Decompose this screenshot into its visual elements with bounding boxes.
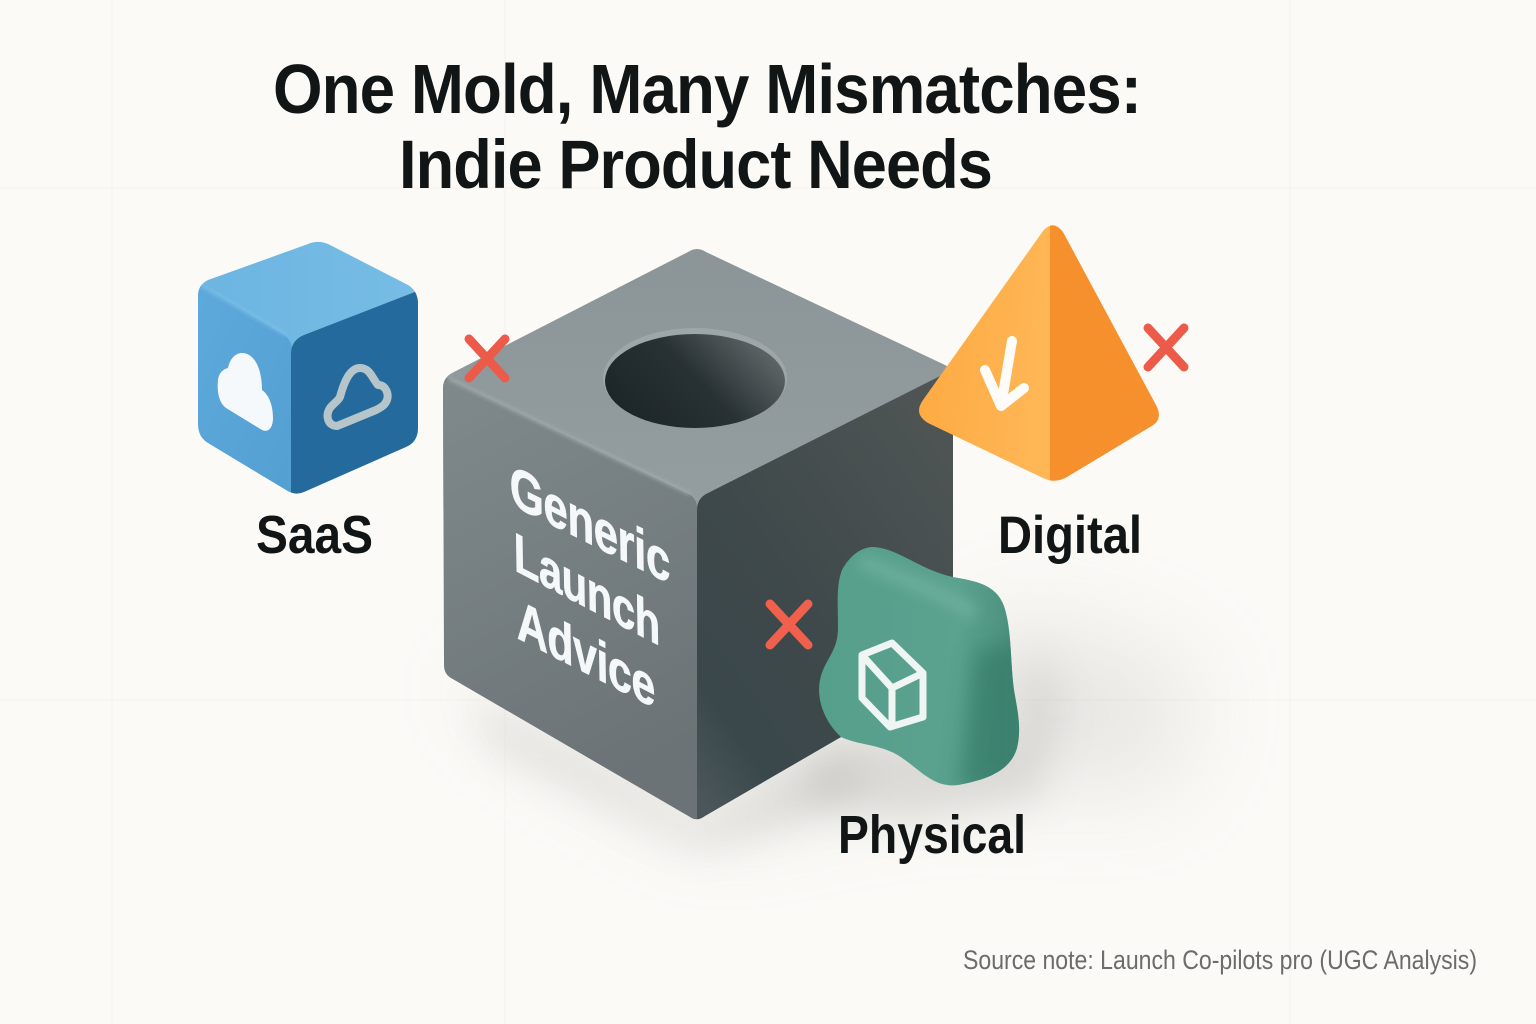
title xyxy=(273,50,1141,203)
icon: outline cloud xyxy=(328,368,388,426)
mold top face xyxy=(435,240,960,510)
label: Physical: Physical xyxy=(838,805,1026,865)
mold text: Generic xyxy=(509,453,670,597)
mismatch mark: SaaS xyxy=(469,339,505,378)
pyramid left face xyxy=(919,226,1051,480)
label: Digital: Digital xyxy=(998,506,1142,565)
mold text: Advice xyxy=(516,588,655,721)
icon: blue SaaS cube xyxy=(198,242,418,494)
title: One Mold, Many Mismatches: xyxy=(273,50,1141,128)
icon: orange Digital pyramid xyxy=(919,225,1159,481)
cube top face xyxy=(198,242,418,348)
label: SaaS: SaaS xyxy=(256,505,373,565)
icon: gray generic mold cube xyxy=(435,240,960,830)
mismatch mark: Digital xyxy=(1148,328,1184,367)
icon: box outline xyxy=(862,643,923,727)
mold text xyxy=(509,453,670,721)
title: Indie Product Needs xyxy=(399,126,992,203)
mold right face xyxy=(697,366,960,830)
mold left face xyxy=(436,373,697,830)
floor shadow xyxy=(450,610,1200,850)
mismatch mark: Physical xyxy=(770,604,808,645)
icon: white cloud xyxy=(218,353,273,431)
mold text: Launch xyxy=(513,520,660,658)
mold hole xyxy=(603,328,787,428)
cube left face xyxy=(198,285,292,493)
pyramid right face xyxy=(1050,225,1159,481)
icon: green Physical blob xyxy=(819,547,1030,790)
cube edge highlight xyxy=(200,285,286,335)
cube right face xyxy=(291,292,418,494)
icon: down arrow xyxy=(985,341,1024,406)
mold edge highlight xyxy=(449,379,690,494)
